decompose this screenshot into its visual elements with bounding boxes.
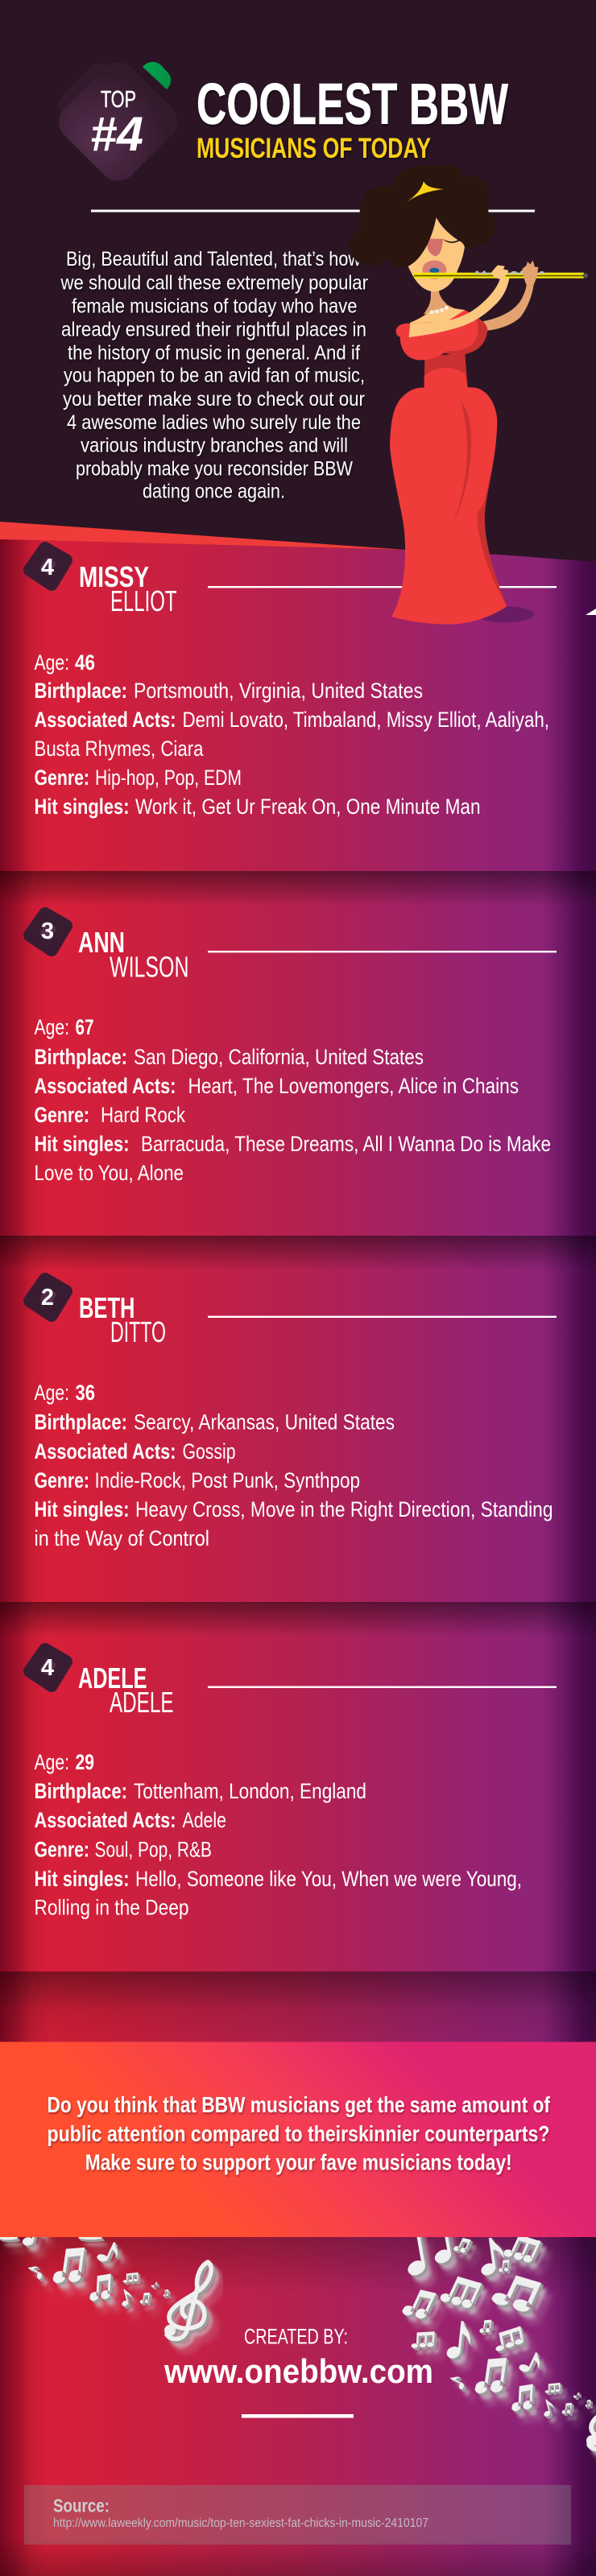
panel: Adele <box>30 1649 557 1920</box>
credit <box>163 2325 433 2418</box>
lower body <box>390 353 534 625</box>
icon: treble clef <box>164 2262 211 2339</box>
details: 29 <box>76 1750 94 1774</box>
rank badge 2: 2 <box>41 1285 54 1311</box>
icon: music notes right cluster <box>401 2221 590 2417</box>
website: www.onebbw.com <box>163 2352 433 2390</box>
section divider shadow 3 <box>0 1236 596 1271</box>
section divider shadow 5 <box>0 1971 596 2042</box>
intro paragraph: you happen to be an avid fan of music, <box>64 365 365 387</box>
details: Soul, Pop, R&B <box>95 1837 212 1861</box>
intro paragraph: female musicians of today who have <box>72 295 358 317</box>
details: Associated Acts: <box>34 708 176 732</box>
panel: Beth Ditto <box>30 1279 557 1550</box>
details: Birthplace: <box>34 679 127 703</box>
details <box>34 1015 551 1185</box>
name: ANN <box>78 926 125 959</box>
necklace <box>430 306 449 314</box>
rank badge 4: 4 <box>41 555 54 580</box>
name divider <box>208 951 557 952</box>
created by label: CREATED BY: <box>244 2325 348 2349</box>
neck <box>424 290 453 315</box>
name: BETH <box>79 1291 135 1324</box>
source panel <box>24 2485 571 2545</box>
details: Indie-Rock, Post Punk, Synthpop <box>95 1468 360 1492</box>
header divider <box>91 209 535 213</box>
badge label #4: #4 <box>90 107 143 161</box>
details: Love to You, Alone <box>34 1161 184 1185</box>
source label: Source: <box>53 2496 110 2516</box>
details: 36 <box>76 1381 95 1405</box>
details: Hello, Someone like You, When we were Young, <box>135 1867 522 1891</box>
name divider <box>208 1686 557 1688</box>
intro paragraph: you better make sure to check out our <box>63 388 365 411</box>
rank badge 2 <box>30 1279 66 1315</box>
stage gradient background <box>0 539 596 2576</box>
intro paragraph: Big, Beautiful and Talented, that’s how <box>66 248 362 270</box>
details: Portsmouth, Virginia, United States <box>134 679 423 703</box>
details <box>34 1381 553 1550</box>
dark header background <box>0 0 596 564</box>
name: MISSY <box>79 560 149 593</box>
intro paragraph: the history of music in general. And if <box>68 341 360 364</box>
stage shadow <box>475 606 534 622</box>
intro paragraph: dating once again. <box>143 481 285 503</box>
footer bottom shadow <box>0 2536 596 2576</box>
details: Birthplace: <box>34 1410 127 1435</box>
details: Work it, Get Ur Freak On, One Minute Man <box>135 795 480 819</box>
name: WILSON <box>110 950 188 984</box>
details: Associated Acts: <box>34 1808 176 1832</box>
rank badge 4 <box>30 1649 66 1686</box>
name divider <box>208 1316 557 1318</box>
name <box>78 1662 174 1719</box>
name: ADELE <box>110 1686 174 1719</box>
badge: top 4 <box>51 55 185 188</box>
details: Rolling in the Deep <box>34 1896 188 1920</box>
icon: treble clef at right edge <box>586 2372 596 2449</box>
details: Hit singles: <box>34 1867 129 1891</box>
details: Searcy, Arkansas, United States <box>134 1410 395 1435</box>
details: Age: <box>34 1750 69 1774</box>
details: Adele <box>182 1808 226 1832</box>
details: Gossip <box>182 1439 235 1463</box>
hand on flute far <box>522 260 538 285</box>
rank badge 3: 3 <box>41 919 54 944</box>
cheek <box>427 239 443 256</box>
front arm <box>409 276 510 337</box>
section divider shadow 2 <box>0 871 596 906</box>
panel: Missy Elliot <box>30 548 557 819</box>
details: Hit singles: <box>34 795 129 819</box>
name: DITTO <box>110 1315 166 1348</box>
details: 46 <box>75 650 95 675</box>
intro paragraph: 4 awesome ladies who surely rule the <box>67 411 361 434</box>
details: 67 <box>76 1015 93 1039</box>
call to action text: Make sure to support your fave musicians today! <box>85 2150 512 2175</box>
red curtain band <box>0 522 407 550</box>
intro paragraph: various industry branches and will <box>81 434 348 456</box>
lips <box>422 260 446 279</box>
source url: http://www.laweekly.com/music/top-ten-sexiest-fat-chicks-in-music-2410107 <box>53 2516 428 2530</box>
skirt fold <box>453 401 471 522</box>
details: San Diego, California, United States <box>134 1045 424 1069</box>
credit underline <box>242 2414 354 2418</box>
hair accent <box>405 181 444 203</box>
rank badge 4: 4 <box>41 1655 54 1681</box>
details: in the Way of Control <box>34 1526 209 1550</box>
face <box>408 217 465 291</box>
details: Genre: <box>34 1837 89 1861</box>
details: Tottenham, London, England <box>134 1779 366 1803</box>
details <box>34 1750 522 1920</box>
lips opening <box>429 268 439 273</box>
details: Heart, The Lovemongers, Alice in Chains <box>188 1074 519 1098</box>
details: Hip-hop, Pop, EDM <box>95 766 242 790</box>
hair <box>350 165 497 267</box>
name <box>79 1291 166 1348</box>
details: Associated Acts: <box>34 1439 176 1463</box>
details <box>34 650 549 819</box>
details: Busta Rhymes, Ciara <box>34 737 204 761</box>
icon: music notes left cluster <box>0 2218 168 2307</box>
eye lash <box>443 237 466 243</box>
details: Associated Acts: <box>34 1074 176 1098</box>
white clef tip at right edge <box>586 609 596 615</box>
hand on flute near <box>491 265 509 279</box>
intro paragraph: already ensured their rightful places in <box>61 319 366 341</box>
badge green corner <box>143 62 171 89</box>
subtitle: MUSICIANS OF TODAY <box>197 132 431 164</box>
details: Genre: <box>34 766 89 790</box>
details: Age: <box>34 1015 69 1039</box>
name divider <box>208 586 557 588</box>
back arm <box>483 283 534 331</box>
name: ADELE <box>78 1662 147 1695</box>
badge fold <box>58 64 107 112</box>
rank badge 3 <box>30 914 66 950</box>
badge label TOP: TOP <box>101 87 136 113</box>
details: Hit singles: <box>34 1497 129 1521</box>
bust <box>396 310 487 360</box>
waist <box>424 353 468 388</box>
torso front <box>424 368 468 389</box>
intro paragraph: we should call these extremely popular <box>60 271 368 294</box>
illustration: flute player <box>350 165 588 625</box>
details: Genre: <box>34 1103 89 1127</box>
rank badge 4 <box>30 548 66 584</box>
details: Birthplace: <box>34 1779 127 1803</box>
details: Genre: <box>34 1468 89 1492</box>
chest <box>410 308 465 324</box>
details: Hard Rock <box>101 1103 186 1127</box>
name <box>79 560 177 617</box>
name <box>78 926 188 984</box>
call to action panel <box>0 2041 596 2237</box>
details: Age: <box>34 1381 69 1405</box>
intro paragraph: probably make you reconsider BBW <box>76 457 353 480</box>
details: Hit singles: <box>34 1132 129 1156</box>
details: Birthplace: <box>34 1045 127 1069</box>
upper body and head <box>350 165 588 360</box>
skirt <box>390 387 507 625</box>
name: ELLIOT <box>110 584 177 617</box>
panel: Ann Wilson <box>30 914 557 1185</box>
skirt right shade <box>477 430 507 606</box>
flute <box>414 270 588 279</box>
intro paragraph <box>60 248 368 503</box>
details: Age: <box>34 650 69 675</box>
bust shade <box>445 316 487 354</box>
footer top shadow <box>0 2237 596 2293</box>
call to action text <box>47 2092 551 2175</box>
section divider shadow 4 <box>0 1602 596 1637</box>
